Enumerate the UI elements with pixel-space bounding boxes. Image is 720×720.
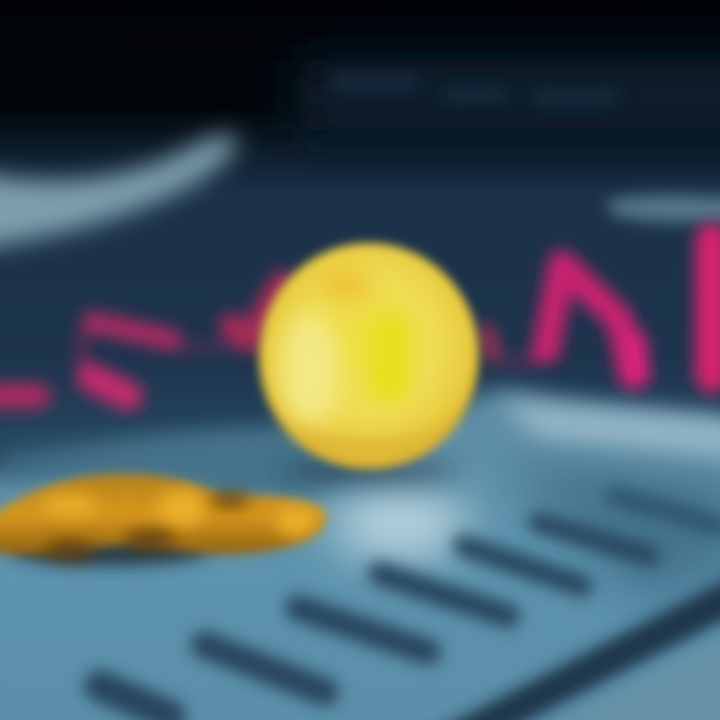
large gold coin [259, 243, 479, 469]
paper: bright highlight below coin [330, 491, 470, 559]
pile shadow [10, 534, 210, 566]
light swoosh at upper left [0, 136, 238, 250]
paper: shadow in right zone [500, 460, 720, 600]
pile body [0, 474, 326, 554]
gold coins pile at left [0, 474, 326, 566]
table rows: dark blurred bars [100, 496, 720, 716]
paper: lower right corner sheet [530, 630, 720, 720]
coin glint: pale left face [280, 314, 340, 426]
blurred screen marks at top right [330, 74, 620, 106]
paper edge: dark diagonal band at bottom right [420, 572, 720, 720]
coin glint: orange top [319, 271, 371, 299]
paper: dark shaded strip behind coin [0, 430, 440, 500]
pile dark spots [46, 493, 250, 559]
paper: light sheet in the foreground [0, 390, 720, 720]
background: blurred navy band at top right [300, 60, 720, 130]
light stripe at upper right [606, 196, 720, 222]
coin body [259, 243, 479, 469]
pile highlights [42, 490, 316, 536]
pink chart line: right [486, 240, 712, 376]
pink chart line: left [0, 284, 282, 396]
paper: lighter area at right [500, 400, 720, 462]
coin glint: vivid centre [372, 315, 408, 400]
coin rim shading: lower edge [285, 415, 460, 455]
coin shadow [280, 460, 460, 484]
